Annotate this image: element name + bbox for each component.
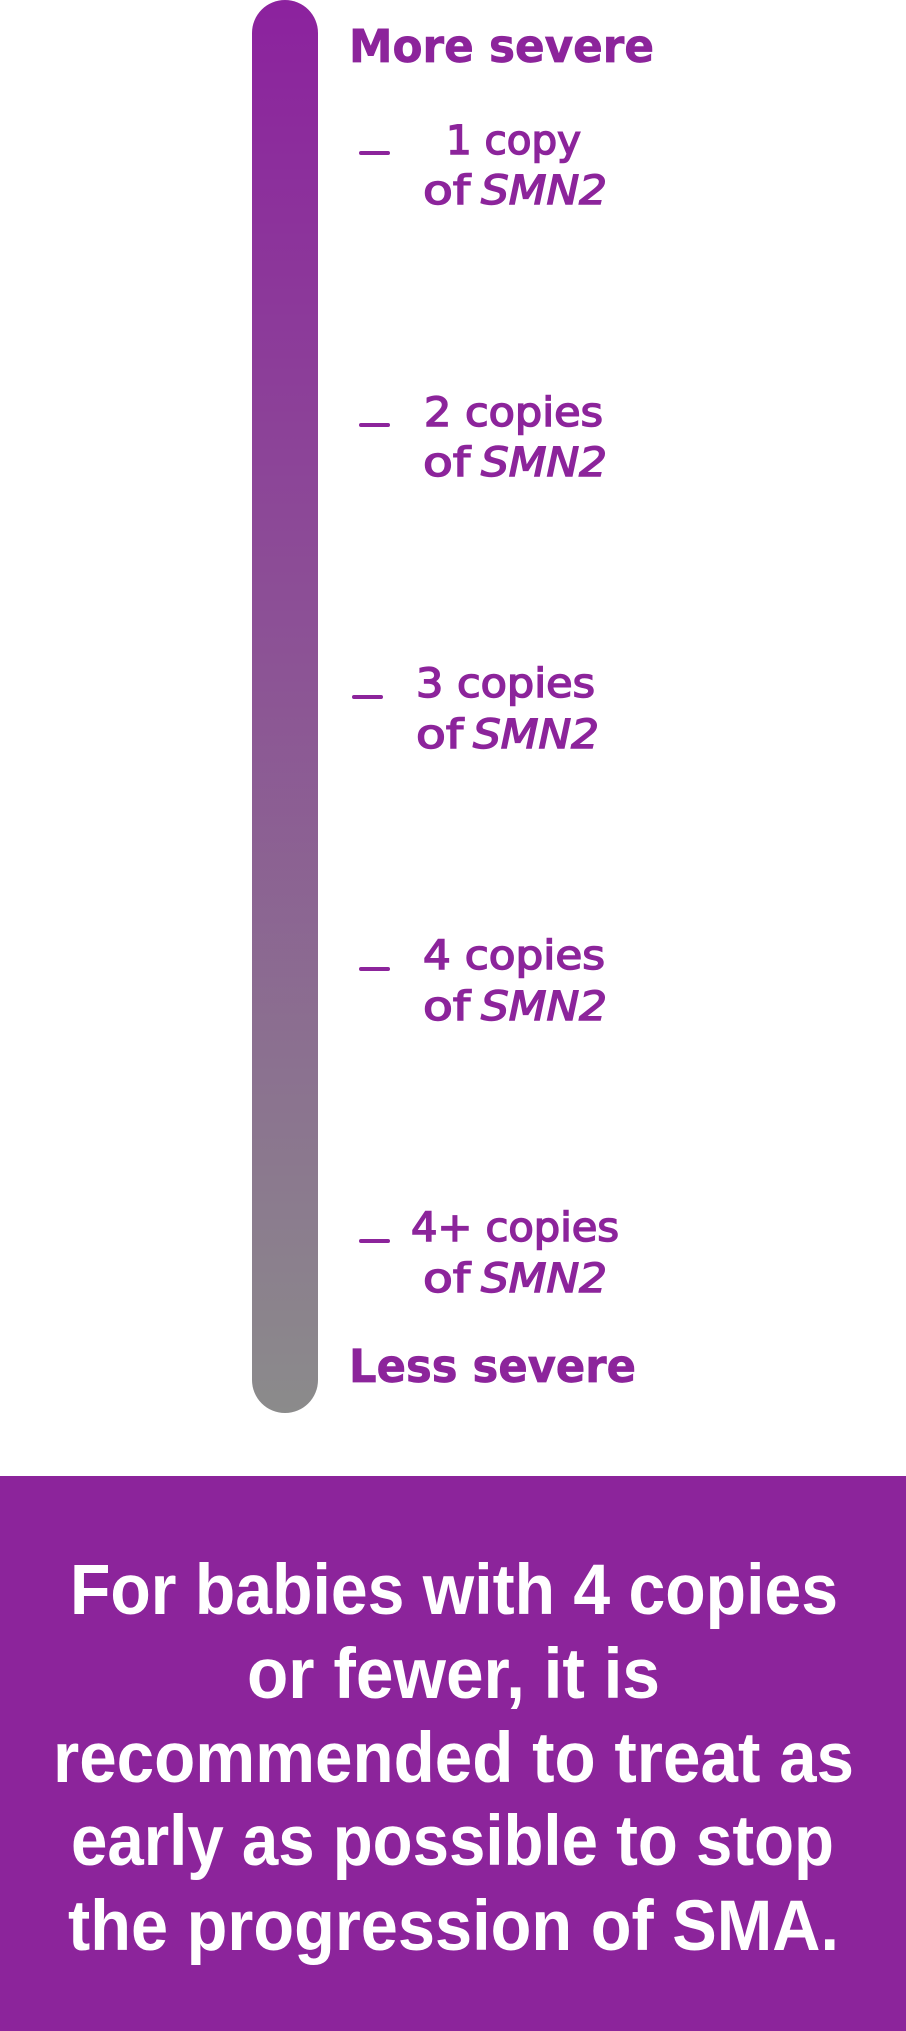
label: 3 copies of SMN2: of bbox=[416, 712, 464, 758]
label: 4+ copies of SMN2: SMN2 bbox=[481, 1256, 607, 1302]
heading: more severe: More severe bbox=[349, 20, 654, 73]
label: 4+ copies of SMN2: 4+ copies bbox=[411, 1205, 619, 1251]
label: 1 copy of SMN2: of bbox=[423, 168, 471, 214]
label: 2 copies of SMN2 bbox=[359, 390, 607, 486]
recommendation text: or fewer, it is bbox=[247, 1635, 660, 1714]
label: 4 copies of SMN2: SMN2 bbox=[481, 984, 607, 1030]
recommendation text: early as possible to stop bbox=[71, 1802, 834, 1881]
label: 2 copies of SMN2: 2 copies bbox=[424, 390, 603, 436]
label: 1 copy of SMN2: SMN2 bbox=[481, 168, 607, 214]
label: 4 copies of SMN2 bbox=[359, 933, 607, 1030]
label: 4+ copies of SMN2 bbox=[359, 1205, 619, 1302]
label: 4+ copies of SMN2: of bbox=[423, 1256, 471, 1302]
label: 2 copies of SMN2: SMN2 bbox=[481, 440, 607, 486]
severity gradient bar bbox=[252, 0, 318, 1413]
label: 2 copies of SMN2: of bbox=[423, 440, 471, 486]
label: 3 copies of SMN2: 3 copies bbox=[416, 661, 595, 707]
heading: less severe: Less severe bbox=[349, 1340, 636, 1393]
label: 4 copies of SMN2: 4 copies bbox=[423, 933, 605, 979]
label: 4 copies of SMN2: of bbox=[423, 984, 471, 1030]
label: 1 copy of SMN2 bbox=[359, 118, 607, 214]
label: 1 copy of SMN2: 1 copy bbox=[446, 118, 581, 164]
recommendation text: For babies with 4 copies bbox=[70, 1551, 838, 1630]
recommendation text: recommended to treat as bbox=[53, 1719, 854, 1798]
panel: recommendation bbox=[0, 1476, 906, 2031]
label: 3 copies of SMN2: SMN2 bbox=[473, 712, 599, 758]
recommendation text: the progression of SMA. bbox=[68, 1887, 839, 1966]
label: 3 copies of SMN2 bbox=[352, 661, 599, 758]
recommendation text bbox=[53, 1551, 854, 1966]
